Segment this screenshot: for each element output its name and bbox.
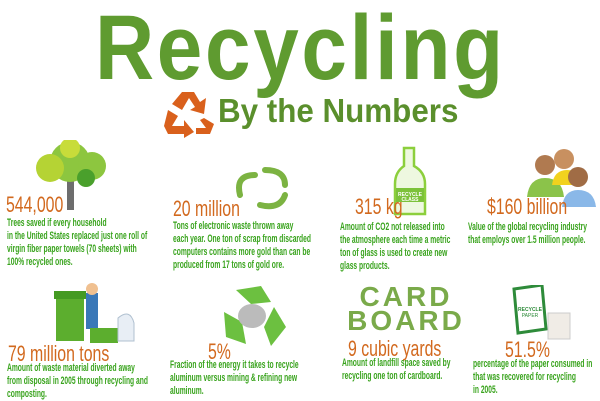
stat: 5%: [170, 339, 299, 397]
description: glass products.: [340, 260, 390, 272]
description: 100% recycled ones.: [7, 256, 73, 268]
icon: bins: [54, 283, 134, 343]
icon: recycle paper: [512, 285, 570, 340]
number: 20 million: [173, 196, 240, 221]
description: Trees saved if every household: [7, 217, 107, 229]
description: in 2005.: [473, 384, 498, 396]
description: Fraction of the energy it takes to recycle: [170, 359, 299, 371]
description: ton of glass is used to create new: [340, 247, 447, 259]
description: Tons of electronic waste thrown away: [173, 220, 293, 232]
icon: recycle symbol: [164, 92, 214, 138]
number: $160 billion: [487, 194, 567, 219]
description: that was recovered for recycling: [473, 371, 576, 383]
icon: cardboard letters: BOARD: [347, 305, 465, 336]
description: [7, 362, 148, 400]
stat: 20 million: [173, 196, 311, 271]
stat: 544,000: [6, 192, 148, 268]
icon: tree: [36, 140, 106, 210]
icon: recycle paper: PAPER: [522, 313, 539, 319]
number: 79 million tons: [8, 341, 109, 366]
stat: 9 cubic yards: [342, 336, 451, 382]
description: Amount of CO2 not released into: [340, 221, 445, 233]
stat: 51.5%: [473, 337, 592, 396]
description: Amount of waste material diverted away: [7, 362, 135, 374]
description: from disposal in 2005 through recycling and: [7, 375, 148, 387]
stat: 79 million tons: [7, 341, 148, 400]
description: the atmosphere each time a metric: [340, 234, 450, 246]
number: 51.5%: [505, 337, 550, 362]
description: [473, 358, 592, 396]
description: that employs over 1.5 million people.: [468, 234, 585, 246]
icon: recycle paper: RECYCLE: [518, 307, 543, 313]
icon: glass bottle: RECYCLE: [398, 192, 423, 198]
title: Recycling: [95, 0, 506, 99]
icon: glass bottle: [394, 146, 426, 216]
number: 315 kg: [355, 194, 403, 219]
icon: cardboard letters: [347, 281, 465, 336]
description: percentage of the paper consumed in: [473, 358, 592, 370]
icon: can recycle: [224, 286, 286, 346]
description: [173, 220, 311, 271]
stat: $160 billion: [468, 194, 587, 246]
description: [342, 357, 451, 382]
icon: glass bottle: CLASS: [402, 197, 419, 203]
icon: plugs: [236, 167, 288, 210]
number: 544,000: [6, 192, 63, 217]
description: recycling one ton of cardboard.: [342, 370, 442, 382]
description: aluminum versus mining & refining new: [170, 372, 297, 384]
description: [340, 221, 450, 272]
description: computers contains more gold than can be: [173, 246, 310, 258]
description: each year. One ton of scrap from discarded: [173, 233, 311, 245]
number: 9 cubic yards: [348, 336, 441, 361]
description: produced from 17 tons of gold ore.: [173, 259, 284, 271]
description: Amount of landfill space saved by: [342, 357, 451, 369]
description: Value of the global recycling industry: [468, 221, 587, 233]
description: composting.: [7, 388, 47, 400]
description: virgin fiber paper towels (70 sheets) with: [7, 243, 137, 255]
subtitle: By the Numbers: [218, 92, 458, 129]
description: [7, 217, 148, 268]
icon: people: [527, 149, 596, 207]
description: aluminum.: [170, 385, 204, 397]
description: in the United States replaced just one roll of: [7, 230, 147, 242]
description: [468, 221, 587, 246]
description: [170, 359, 299, 397]
stat: 315 kg: [340, 194, 450, 272]
icon: cardboard letters: CARD: [360, 281, 452, 312]
number: 5%: [208, 339, 231, 364]
